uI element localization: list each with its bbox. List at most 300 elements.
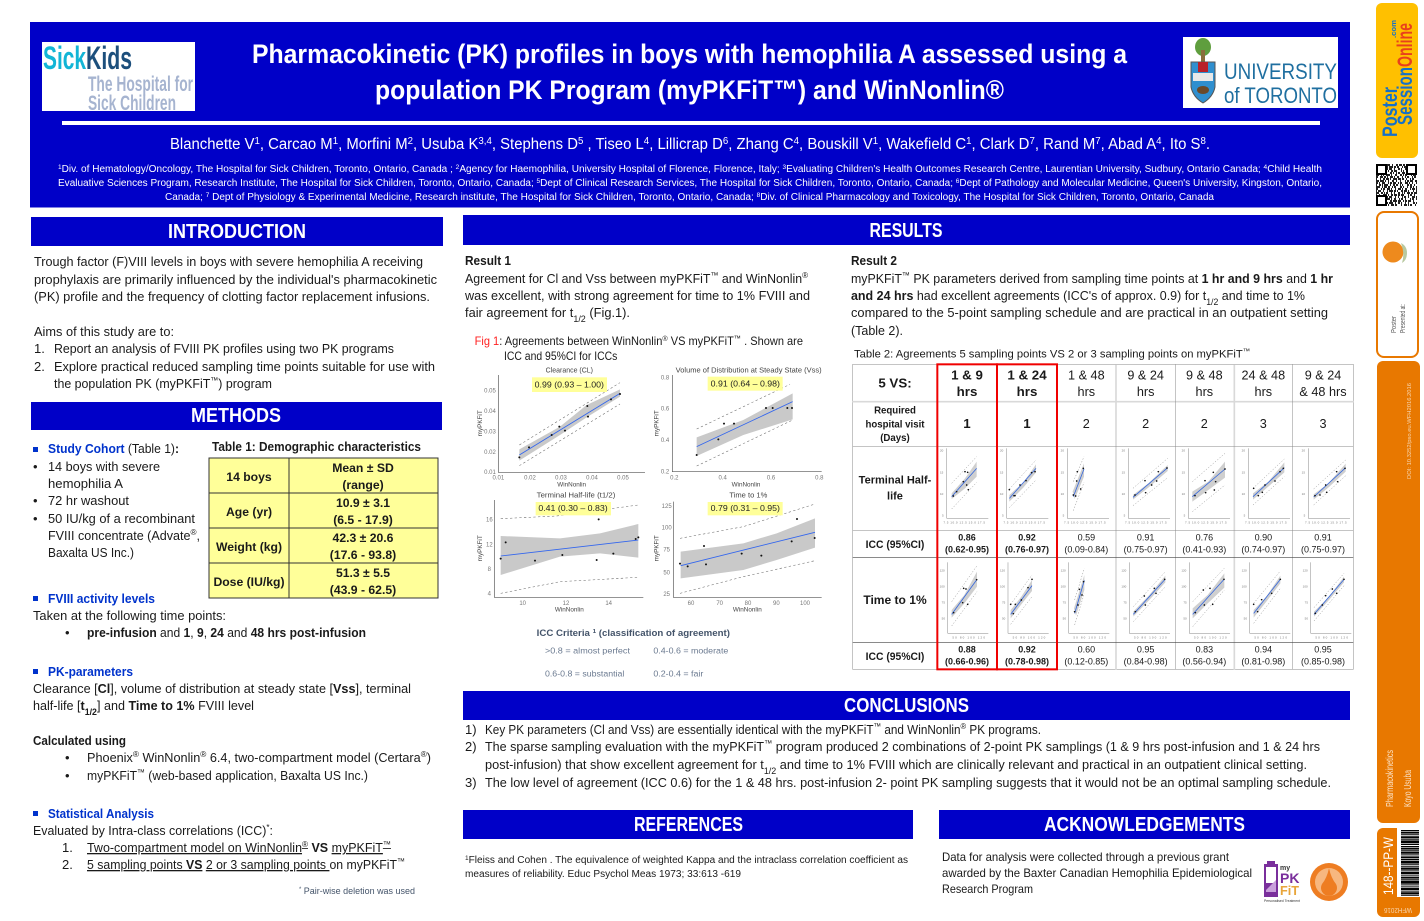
ICC criteria legend: 0.4-0.6 = moderate [653, 645, 729, 655]
logo: myPKFiT: Personalised Treatment [1264, 899, 1300, 903]
ICC values row for half-life: 0.59 [1078, 533, 1095, 543]
mini chart: half-life 9, 24 & 48: 10 [1302, 492, 1305, 496]
panel: references: measures of reliability. Educ Psychol Meas 1973; 33:613 -619 [465, 869, 741, 880]
mini chart: time 1 & 48: 50 80 100 120 [1073, 635, 1106, 639]
chart: terminal half-life: 0.41 (0.30 – 0.83) [538, 503, 608, 513]
mini chart: time 1 & 24: 50 80 100 120 [1013, 635, 1046, 639]
mini chart: time 1 & 9: 50 80 100 120 [952, 635, 985, 639]
study cohort: • [33, 459, 38, 474]
required hospital visit row: 3 [1319, 417, 1327, 431]
mini chart: half-life 1 & 48 [1061, 448, 1109, 525]
sidebar: topic and author strip: DOI: 10.3252/pso.eu.WFH2016.2016 [1407, 383, 1413, 479]
sidebar: PosterSessionOnline logo: Poster [1379, 87, 1402, 137]
ICC values row for time to 1%: 0.95 [1137, 645, 1154, 655]
sidebar: presented-at box: Poster [1391, 315, 1398, 333]
panel: references: REFERENCES [634, 814, 743, 836]
ICC values row for time to 1%: (0.85-0.98) [1301, 657, 1345, 667]
panel: acknowledgements: Research Program [942, 882, 1033, 896]
result 1 text: Result 1 [465, 253, 511, 268]
sidebar: PosterSessionOnline logo: Online [1394, 23, 1417, 67]
mini chart: half-life 9 & 48: 5 [1184, 514, 1186, 518]
mini chart: half-life 24 & 48: 20 [1242, 449, 1245, 453]
mini chart: time 1 & 9 [940, 562, 988, 639]
table header row: 9 & 24 [1305, 368, 1341, 382]
chart: clearance: Clearance (CL) [546, 368, 593, 375]
ICC values row for half-life: (0.74-0.97) [1241, 545, 1285, 555]
title [252, 39, 1128, 105]
panel: references [463, 810, 913, 880]
logo: University of Toronto: of TORONTO [1224, 83, 1337, 108]
study cohort: Baxalta US Inc.) [48, 545, 134, 560]
ICC values row for time to 1%: 0.88 [958, 645, 976, 655]
chart: time to 1%: WinNonlin [733, 606, 762, 613]
mini chart: time 9 & 48 [1181, 562, 1230, 639]
result 1 text: fair agreement for t1/2 (Fig.1). [465, 305, 630, 324]
chart: clearance: myPKFiT [477, 410, 484, 436]
affiliations: Canada; 7 Dept of Physiology & Experimental Medicine, Research institute, The Hospital for Sick Children, Toronto, Ontario, Canada; 8Div. of Clinical Pharmacology and Toxicology, The Hospital for Sick Children, Toronto, Ontario, Canada [165, 192, 1214, 203]
chart: time to 1%: 90 [773, 601, 780, 607]
ICC values row for time to 1%: 0.83 [1196, 645, 1213, 655]
result 1 text [464, 253, 810, 324]
logo: myPKFiT: my [1280, 865, 1290, 872]
chart: clearance: WinNonlin [557, 481, 587, 488]
FVIII activity levels [33, 591, 366, 640]
panel: introduction: Aims of this study are to: [34, 324, 174, 339]
calculated using: Phoenix® WinNonlin® 6.4, two-compartment model (Certara®) [87, 749, 431, 765]
mini chart: time 9, 24 & 48: 50 [1305, 616, 1308, 620]
chart: volume of distribution: Volume of Distribution at Steady State (Vss) [676, 368, 822, 375]
chart: time to 1%: 0.79 (0.31 – 0.95) [711, 503, 780, 513]
mini chart: half-life 9 & 24: 7.5 10.0 12.5 15.0 17.5 [1125, 521, 1167, 525]
ICC values row for time to 1%: 0.94 [1255, 645, 1272, 655]
ICC values row for time to 1%: ICC (95%CI) [866, 651, 925, 663]
ICC criteria legend: ICC Criteria 1 (classification of agreement) [537, 628, 730, 638]
mini chart: half-life 9 & 24: 10 [1122, 492, 1125, 496]
logo: SickKids: Sick Children [88, 92, 176, 115]
ICC values row for half-life: 0.91 [1137, 533, 1154, 543]
mini chart: time 9 & 24 [1121, 562, 1170, 639]
panel: references: 1Fleiss and Cohen . The equivalence of weighted Kappa and the intraclass correlation coefficient as [465, 854, 908, 866]
sidebar: topic and author strip: Pharmacokinetics [1385, 750, 1396, 807]
chart: clearance: 0.01 [493, 476, 505, 482]
required hospital visit row [865, 406, 1327, 444]
calculated using: • [65, 750, 70, 765]
panel: acknowledgements [939, 810, 1350, 903]
ICC values row for half-life: ICC (95%CI) [866, 539, 925, 551]
required hospital visit row: 2 [1201, 417, 1208, 431]
sidebar: poster number and barcode: WFH2016 [1384, 906, 1412, 915]
chart: terminal half-life: 16 [486, 518, 493, 524]
result 2 text: myPKFiT™ PK parameters derived from sampling time points at 1 hr and 9 hrs and 1 hr [851, 270, 1333, 286]
chart: volume of distribution: 0.6 [661, 407, 670, 413]
chart: volume of distribution: 0.8 [815, 476, 824, 482]
authors: Blanchette V1, Carcao M1, Morfini M2, Usuba K3,4, Stephens D5 , Tiseo L4, Lillicrap D6, Zhang C4, Bouskill V1, Wakefield C1, Clark D7, Rand M7, Abad A4, Ito S8. [170, 136, 1210, 153]
mini chart: half-life 1 & 9: 5 [942, 514, 944, 518]
mini chart: time 9 & 24: 100 [1121, 584, 1127, 588]
mini chart: half-life 24 & 48: 5 [1244, 514, 1246, 518]
ICC values row for time to 1%: 0.92 [1018, 645, 1036, 655]
panel: conclusions: 1) [465, 722, 477, 737]
chart: time to 1%: 125 [662, 504, 672, 510]
mini chart: half-life 24 & 48: 10 [1242, 492, 1245, 496]
chart: time to 1%: 100 [662, 526, 672, 532]
chart: clearance: 0.02 [524, 476, 536, 482]
panel: conclusions [463, 691, 1350, 790]
result 2 text: and 24 hrs had excellent agreements (ICC's of approx. 0.9) for t1/2 and time to 1% [851, 288, 1305, 307]
chart: volume of distribution: 0.2 [661, 470, 670, 476]
mini chart: half-life 9 & 24: 5 [1124, 514, 1126, 518]
required hospital visit row: hospital visit [865, 419, 925, 430]
sidebar: QR code [1376, 164, 1417, 206]
mini chart: time 9 & 24: 50 80 100 120 [1134, 635, 1167, 639]
table header row: hrs [1137, 385, 1154, 399]
mini chart: time 9 & 24: 50 [1123, 616, 1127, 620]
sidebar: poster number and barcode [1377, 828, 1420, 917]
chart: terminal half-life: 14 [605, 601, 613, 607]
ICC values row for half-life: 0.90 [1255, 533, 1272, 543]
statistical analysis: 1. [62, 840, 73, 855]
mini chart: time 1 & 9: 100 [940, 584, 945, 588]
ICC values row for time to 1%: (0.84-0.98) [1124, 657, 1168, 667]
statistical analysis: Statistical Analysis [48, 806, 154, 821]
sidebar: PosterSessionOnline logo [1376, 3, 1418, 158]
table header row: hrs [1017, 384, 1037, 399]
panel: conclusions: 2) [465, 739, 477, 754]
chart: time to 1%: 60 [688, 601, 695, 607]
panel: results heading: RESULTS [870, 220, 942, 242]
ICC criteria legend: 0.2-0.4 = fair [653, 669, 704, 679]
required hospital visit row: 2 [1083, 417, 1090, 431]
table header row: hrs [1255, 385, 1272, 399]
ICC values row for time to 1%: (0.78-0.98) [1005, 657, 1049, 667]
sidebar: presented-at box: Presented at: [1400, 304, 1407, 333]
mini chart: half-life 9 & 48: 20 [1182, 449, 1185, 453]
study cohort [33, 441, 200, 560]
chart: clearance: 0.01 [484, 470, 496, 476]
mini chart: time 24 & 48 [1242, 562, 1290, 639]
header banner [30, 22, 1350, 208]
chart: volume of distribution: 0.4 [661, 438, 670, 444]
mini chart: time 1 & 24: 120 [1000, 568, 1005, 572]
table 1: demographic characteristics: Dose (IU/kg) [213, 575, 285, 589]
calculated using: Calculated using [33, 733, 126, 748]
mini chart: half-life 1 & 48: 15 [1061, 471, 1064, 475]
statistical analysis: 2. [62, 857, 73, 872]
calculated using: myPKFiT™ (web-based application, Baxalta US Inc.) [87, 767, 368, 783]
panel: acknowledgements: Data for analysis were collected through a previous grant [942, 850, 1230, 864]
table 1: demographic characteristics: Weight (kg) [216, 540, 282, 554]
logo: myPKFiT [1264, 861, 1300, 903]
title: population PK Program (myPKFiT™) and WinNonlin® [375, 75, 1004, 105]
chart: terminal half-life: WinNonlin [555, 606, 584, 613]
calculated using: • [65, 768, 70, 783]
mini chart: time 9 & 48: 100 [1181, 584, 1187, 588]
table 1: demographic characteristics: (6.5 - 17.9) [333, 513, 393, 527]
mini chart: half-life 1 & 48: 10 [1061, 492, 1064, 496]
ICC values row for time to 1% [866, 645, 1345, 667]
study cohort: FVIII concentrate (Advate®, [48, 527, 200, 543]
ICC values row for half-life: (0.76-0.97) [1005, 545, 1049, 555]
mini chart: half-life 1 & 9: 15 [940, 471, 944, 475]
panel: results heading [463, 215, 1350, 245]
chart: volume of distribution: 0.2 [670, 476, 679, 482]
mini chart: time 9 & 48: 75 [1183, 600, 1187, 604]
mini chart: half-life 9, 24 & 48: 20 [1302, 449, 1305, 453]
chart: terminal half-life: 12 [486, 542, 493, 548]
terminal half-life row label [859, 475, 932, 503]
logo: University of Toronto [1183, 37, 1338, 108]
mini chart: half-life 9, 24 & 48: 5 [1304, 514, 1306, 518]
mini chart: time 24 & 48: 120 [1242, 568, 1247, 572]
sidebar: presented-at box [1377, 212, 1418, 357]
mini chart: half-life 24 & 48: 7.5 10.0 12.5 15.0 17.5 [1245, 521, 1287, 525]
icon: congress emblem [1382, 242, 1407, 263]
sidebar: PosterSessionOnline logo: .com [1391, 20, 1398, 38]
panel: introduction: Report an analysis of FVIII PK profiles using two PK programs [54, 341, 394, 356]
mini chart: time 9, 24 & 48 [1303, 562, 1351, 639]
mini chart: time 9 & 48: 50 80 100 120 [1194, 635, 1227, 639]
mini chart: half-life 1 & 24: 10 [1000, 492, 1004, 496]
mini chart: time 24 & 48: 75 [1244, 600, 1247, 604]
table 1: demographic characteristics: (17.6 - 93.8) [330, 548, 396, 562]
table header row: hrs [1196, 385, 1213, 399]
logo: myPKFiT: PK [1280, 870, 1299, 886]
chart: terminal half-life: 4 [488, 592, 492, 598]
table 1: demographic characteristics: (range) [342, 478, 384, 492]
mini chart: time 9, 24 & 48: 50 80 100 120 [1315, 635, 1348, 639]
ICC criteria legend [537, 628, 730, 679]
ICC values row for half-life: (0.41-0.93) [1182, 545, 1226, 555]
table header row [878, 367, 1347, 399]
PK parameters [33, 664, 411, 717]
mini chart: time 9, 24 & 48: 100 [1303, 584, 1308, 588]
ICC criteria legend: >0.8 = almost perfect [545, 645, 631, 655]
mini chart: half-life 9, 24 & 48: 15 [1302, 471, 1305, 475]
panel: introduction [31, 217, 443, 391]
ICC criteria legend: 0.6-0.8 = substantial [545, 669, 624, 679]
required hospital visit row: Required [874, 406, 916, 417]
required hospital visit row: 1 [1023, 416, 1031, 431]
mini chart: time 9 & 24: 75 [1123, 600, 1127, 604]
ICC values row for half-life [866, 533, 1345, 555]
figure caption: ICC and 95%CI for ICCs [504, 350, 617, 363]
chart: clearance: 0.04 [586, 476, 598, 482]
chart: clearance: 0.05 [617, 476, 629, 482]
panel: methods [31, 402, 442, 897]
chart: terminal half-life: 8 [488, 567, 492, 573]
ICC values row for time to 1%: 0.60 [1078, 645, 1095, 655]
study cohort: 50 IU/kg of a recombinant [48, 511, 195, 526]
panel: conclusions: 3) [465, 775, 477, 790]
statistical analysis: 5 sampling points VS 2 or 3 sampling points on myPKFiT™ [87, 856, 405, 872]
terminal half-life row label: life [887, 491, 903, 503]
mini chart: half-life 1 & 24: 5 [1002, 514, 1004, 518]
ICC values row for half-life: 0.86 [958, 533, 976, 543]
mini chart: time 24 & 48: 100 [1242, 584, 1247, 588]
ICC values row for time to 1%: (0.66-0.96) [945, 657, 989, 667]
chart: time to 1% [654, 493, 822, 613]
mini chart: half-life 9 & 48: 10 [1182, 492, 1185, 496]
table 1: demographic characteristics: (43.9 - 62.5) [330, 583, 396, 597]
table 1: demographic characteristics: 10.9 ± 3.1 [336, 496, 390, 510]
chart: time to 1%: 80 [745, 601, 752, 607]
logo: myPKFiT: FiT [1280, 883, 1299, 898]
chart: clearance: 0.02 [484, 450, 496, 456]
affiliations: 1Div. of Hematology/Oncology, The Hospital for Sick Children, Toronto, Ontario, Canada ; 2Agency for Haemophilia, University Hospital of Florence, Florence, Italy; 3Evaluating Children's Health Outcomes Research Centre, Laurentian University, Sudbury, Ontario Canada; 4Child Health [58, 164, 1322, 175]
mini chart: half-life 9 & 48: 15 [1182, 471, 1185, 475]
mini chart: time 9 & 48: 50 [1183, 616, 1187, 620]
mini chart: time 9 & 48: 120 [1181, 568, 1187, 572]
chart: volume of distribution: 0.6 [767, 476, 776, 482]
figure 1: agreement scatter plots [475, 333, 824, 679]
mini chart: half-life 24 & 48: 15 [1242, 471, 1245, 475]
study cohort: hemophilia A [48, 476, 123, 491]
ICC values row for half-life: 0.91 [1314, 533, 1332, 543]
ICC values row for half-life: (0.75-0.97) [1124, 545, 1168, 555]
title: Pharmacokinetic (PK) profiles in boys with hemophilia A assessed using a [252, 39, 1128, 69]
panel: introduction: the population PK (myPKFiT™) program [54, 375, 272, 391]
panel: conclusions: The sparse sampling evaluation with the myPKFiT™ program produced 2 combinations of 2-point PK samplings (1 & 9 hrs post-infusion and 1 & 24 hrs [485, 738, 1320, 754]
chart: terminal half-life: 10 [519, 601, 527, 607]
logo: SickKids [42, 40, 195, 115]
required hospital visit row: (Days) [880, 433, 910, 444]
mini chart: half-life 9, 24 & 48 [1302, 448, 1350, 525]
mini chart: half-life 1 & 48: 7.5 10.0 12.5 15.0 17.5 [1064, 521, 1106, 525]
required hospital visit row: 2 [1142, 417, 1149, 431]
mini chart: half-life 9 & 24: 15 [1122, 471, 1125, 475]
required hospital visit row: 1 [963, 416, 971, 431]
panel: acknowledgements: ACKNOWLEDGEMENTS [1044, 814, 1245, 836]
mini chart: half-life 9 & 48: 7.5 10.0 12.5 15.0 17.5 [1185, 521, 1227, 525]
mini chart: time 1 & 24: 50 [1002, 616, 1006, 620]
logo: SickKids: Kids [86, 40, 132, 76]
mini chart: half-life 1 & 9: 10 [940, 492, 944, 496]
chart: clearance [477, 368, 645, 488]
panel: methods: METHODS [191, 405, 281, 427]
mini chart: time 9, 24 & 48: 75 [1305, 600, 1308, 604]
mini chart: half-life 1 & 48: 5 [1063, 514, 1065, 518]
mini chart: half-life 1 & 24: 15 [1000, 471, 1004, 475]
chart: terminal half-life: myPKFiT [477, 535, 484, 561]
result 1 text: was excellent, with strong agreement for time to 1% FVIII and [464, 288, 810, 303]
chart: terminal half-life [477, 493, 643, 613]
figure caption [475, 333, 803, 363]
panel: introduction: INTRODUCTION [168, 221, 306, 243]
panel: introduction: Explore practical reduced sampling time points suitable for use with [54, 359, 435, 374]
ICC values row for time to 1%: (0.56-0.94) [1182, 657, 1226, 667]
chart: time to 1%: 70 [716, 601, 724, 607]
logo: SickKids: The Hospital for [88, 73, 193, 96]
sidebar: topic and author strip: Koyo Usuba [1403, 770, 1414, 807]
ICC values row for half-life: (0.09-0.84) [1064, 545, 1108, 555]
calculated using [33, 733, 431, 783]
sidebar: PosterSessionOnline logo: Session [1394, 67, 1417, 125]
affiliations: Evaluative Sciences Program, Research Institute, The Hospital for Sick Children, Toronto, Ontario, Canada; 5Dept of Clinical Research Services, The Hospital for Sick Children, Toronto, Ontario, Canada; 6Dept of Pathology and Molecular Medicine, Queen's University, Kingston, Ontario, [58, 178, 1322, 189]
PK parameters: PK-parameters [48, 664, 133, 679]
panel: conclusions: CONCLUSIONS [844, 695, 969, 717]
statistical analysis [33, 806, 415, 897]
result 2 text: (Table 2). [851, 323, 903, 338]
FVIII activity levels: • [65, 625, 70, 640]
mini chart: half-life 9 & 24: 20 [1122, 449, 1125, 453]
panel: introduction: 1. [34, 341, 45, 356]
mini chart: half-life 1 & 9: 7.5 10.0 12.5 15.0 17.5 [943, 521, 985, 525]
study cohort: • [33, 511, 38, 526]
table header row: hrs [957, 384, 977, 399]
mini chart: time 1 & 48: 50 [1063, 616, 1066, 620]
mini chart: time 9 & 24: 120 [1121, 568, 1127, 572]
mini chart: time 1 & 48: 75 [1063, 600, 1066, 604]
figure caption: Fig 1: Agreements between WinNonlin® VS myPKFiT™ . Shown are [475, 333, 803, 348]
mini chart: time 1 & 24 [1000, 562, 1049, 639]
statistical analysis: Evaluated by Intra-class correlations (ICC)*: [33, 822, 273, 838]
mini chart: half-life 9, 24 & 48: 7.5 10.0 12.5 15.0 17.5 [1305, 521, 1347, 525]
panel: introduction: 2. [34, 359, 45, 374]
panel: acknowledgements: awarded by the Baxter Canadian Hemophilia Epidemiological [942, 866, 1252, 880]
chart: time to 1%: Time to 1% [729, 493, 767, 500]
red highlight boxes [937, 364, 1057, 669]
panel: conclusions: Key PK parameters (Cl and Vss) are essentially identical with the myPKFiT™ and WinNonlin® PK programs. [485, 721, 1041, 737]
chart: volume of distribution: WinNonlin [732, 481, 761, 488]
result 2 text: compared to the 5-point sampling schedule and are practical in an outpatient setting [851, 305, 1328, 320]
mini chart: time 1 & 24: 100 [1000, 584, 1005, 588]
study cohort: • [33, 493, 38, 508]
mini chart: half-life 1 & 24: 20 [1000, 449, 1004, 453]
logo: orange droplet emblem [1310, 863, 1348, 901]
mini chart: time 1 & 48 [1061, 562, 1109, 639]
table 1: demographic characteristics: 42.3 ± 20.6 [333, 531, 394, 545]
mini chart: half-life 1 & 24: 7.5 10.0 12.5 15.0 17.5 [1003, 521, 1045, 525]
ICC values row for half-life: (0.62-0.95) [945, 545, 989, 555]
panel: conclusions: The low level of agreement (ICC 0.6) for the 1 & 48 hrs. post-infusion 2- point PK sampling suggests that it would not be an optimal sampling schedule. [485, 775, 1331, 790]
chart: clearance: 0.04 [484, 409, 496, 415]
ICC values row for half-life: 0.76 [1196, 533, 1213, 543]
panel: conclusions: post-infusion) that show excellent agreement for t1/2 and time to 1% FVIII which are clinically relevant and practical in an outpatient clinical setting. [485, 757, 1307, 776]
sidebar: poster number and barcode: 148--PP-W [1380, 836, 1396, 895]
study cohort: Study Cohort (Table 1): [48, 441, 179, 456]
mini chart: half-life 1 & 9: 20 [940, 449, 944, 453]
panel: introduction: Trough factor (F)VIII levels in boys with severe hemophilia A receiving [34, 254, 423, 269]
chart: volume of distribution [654, 368, 824, 488]
table header row: 1 & 48 [1068, 368, 1105, 382]
table header row: 24 & 48 [1242, 368, 1285, 382]
terminal half-life row label: Terminal Half- [859, 475, 932, 487]
table header row: 1 & 24 [1007, 367, 1047, 382]
chart: volume of distribution: myPKFiT [654, 410, 661, 436]
table 1: demographic characteristics [209, 439, 438, 598]
PK parameters: Clearance [Cl], volume of distribution at steady state [Vss], terminal [33, 681, 411, 696]
study cohort: 72 hr washout [48, 493, 129, 508]
ICC values row for half-life: 0.92 [1018, 533, 1036, 543]
chart: clearance: 0.05 [484, 388, 496, 394]
chart: volume of distribution: 0.4 [718, 476, 727, 482]
table header row: 9 & 48 [1186, 368, 1223, 382]
chart: time to 1%: 100 [800, 601, 811, 607]
mini chart: time 1 & 48: 100 [1061, 584, 1066, 588]
mini chart: half-life 1 & 24 [1000, 448, 1048, 525]
mini chart: half-life 1 & 48: 20 [1061, 449, 1064, 453]
table grid [853, 364, 1353, 669]
table 1: demographic characteristics: Table 1: Demographic characteristics [212, 439, 421, 454]
panel: introduction: prophylaxis are primarily influenced by the individual's pharmacokinetic [34, 272, 437, 287]
affiliations [58, 164, 1322, 203]
mini chart: time 1 & 9: 120 [940, 568, 945, 572]
chart: time to 1%: 25 [663, 592, 671, 598]
study cohort: 14 boys with severe [48, 459, 160, 474]
chart: clearance: 0.99 (0.93 – 1.00) [535, 380, 604, 390]
logo: University of Toronto: UNIVERSITY [1224, 59, 1337, 84]
FVIII activity levels: pre-infusion and 1, 9, 24 and 48 hrs post-infusion [87, 625, 366, 640]
